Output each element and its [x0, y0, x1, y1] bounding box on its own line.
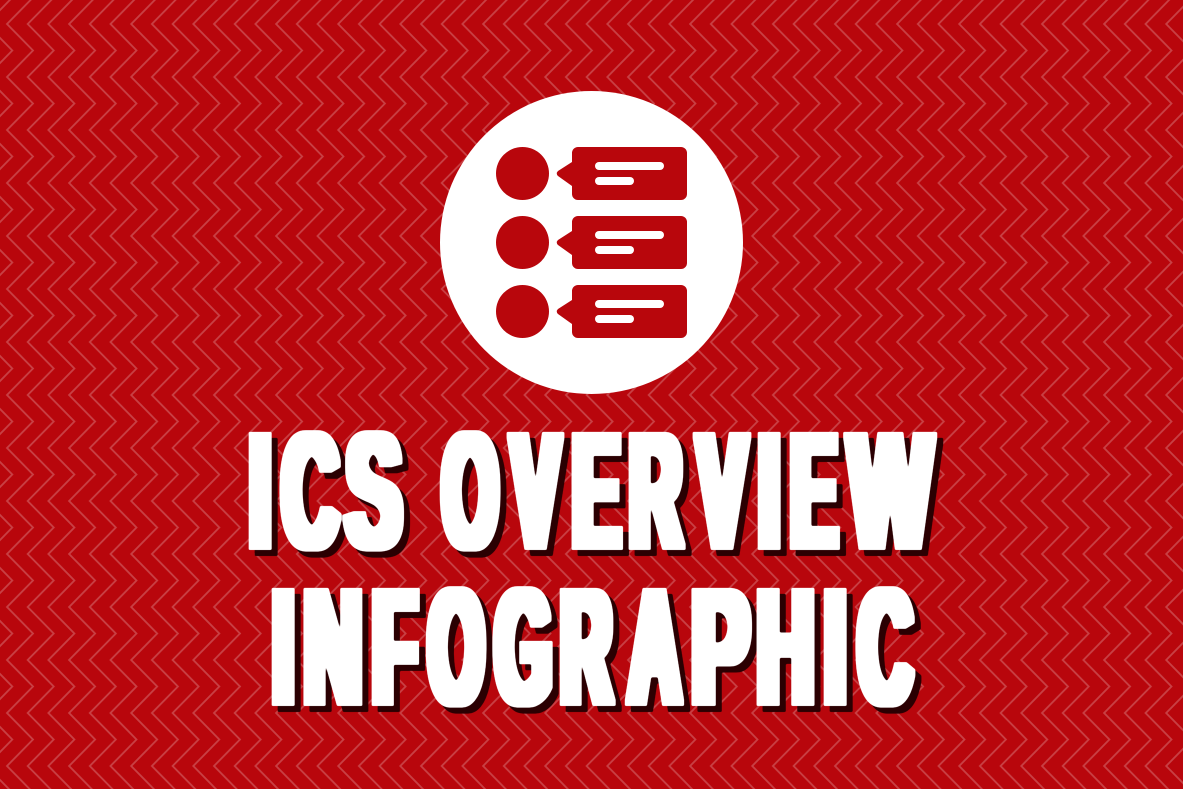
title line 2: A [629, 555, 680, 738]
title line 1: I [758, 399, 780, 582]
title line 1: I [250, 399, 271, 582]
title line 1: W [849, 399, 931, 582]
title [250, 399, 931, 738]
title line 2: F [373, 555, 416, 738]
title line 1: O [443, 399, 498, 582]
title line 2: P [692, 555, 749, 738]
icon: white circle with list of speech bubbles [440, 91, 743, 394]
title line 1: R [630, 399, 681, 582]
title: C [858, 555, 912, 738]
title line 2: R [561, 555, 611, 738]
title line 1: V [698, 399, 746, 582]
title line 2: I [824, 555, 846, 738]
icon row 3 [496, 285, 687, 338]
title line 2: G [495, 555, 551, 738]
icon row 2 [496, 216, 687, 269]
title line 2: O [429, 555, 484, 738]
icon row 1 [496, 147, 687, 200]
title line 2: H [757, 555, 814, 738]
title line 1: S [346, 399, 401, 582]
title line 1: E [573, 399, 620, 582]
title line 1: E [791, 399, 837, 582]
title line 2: N [304, 555, 362, 738]
title line 2: I [272, 555, 294, 738]
title line 1: V [512, 399, 559, 582]
title line 1: C [282, 399, 338, 582]
